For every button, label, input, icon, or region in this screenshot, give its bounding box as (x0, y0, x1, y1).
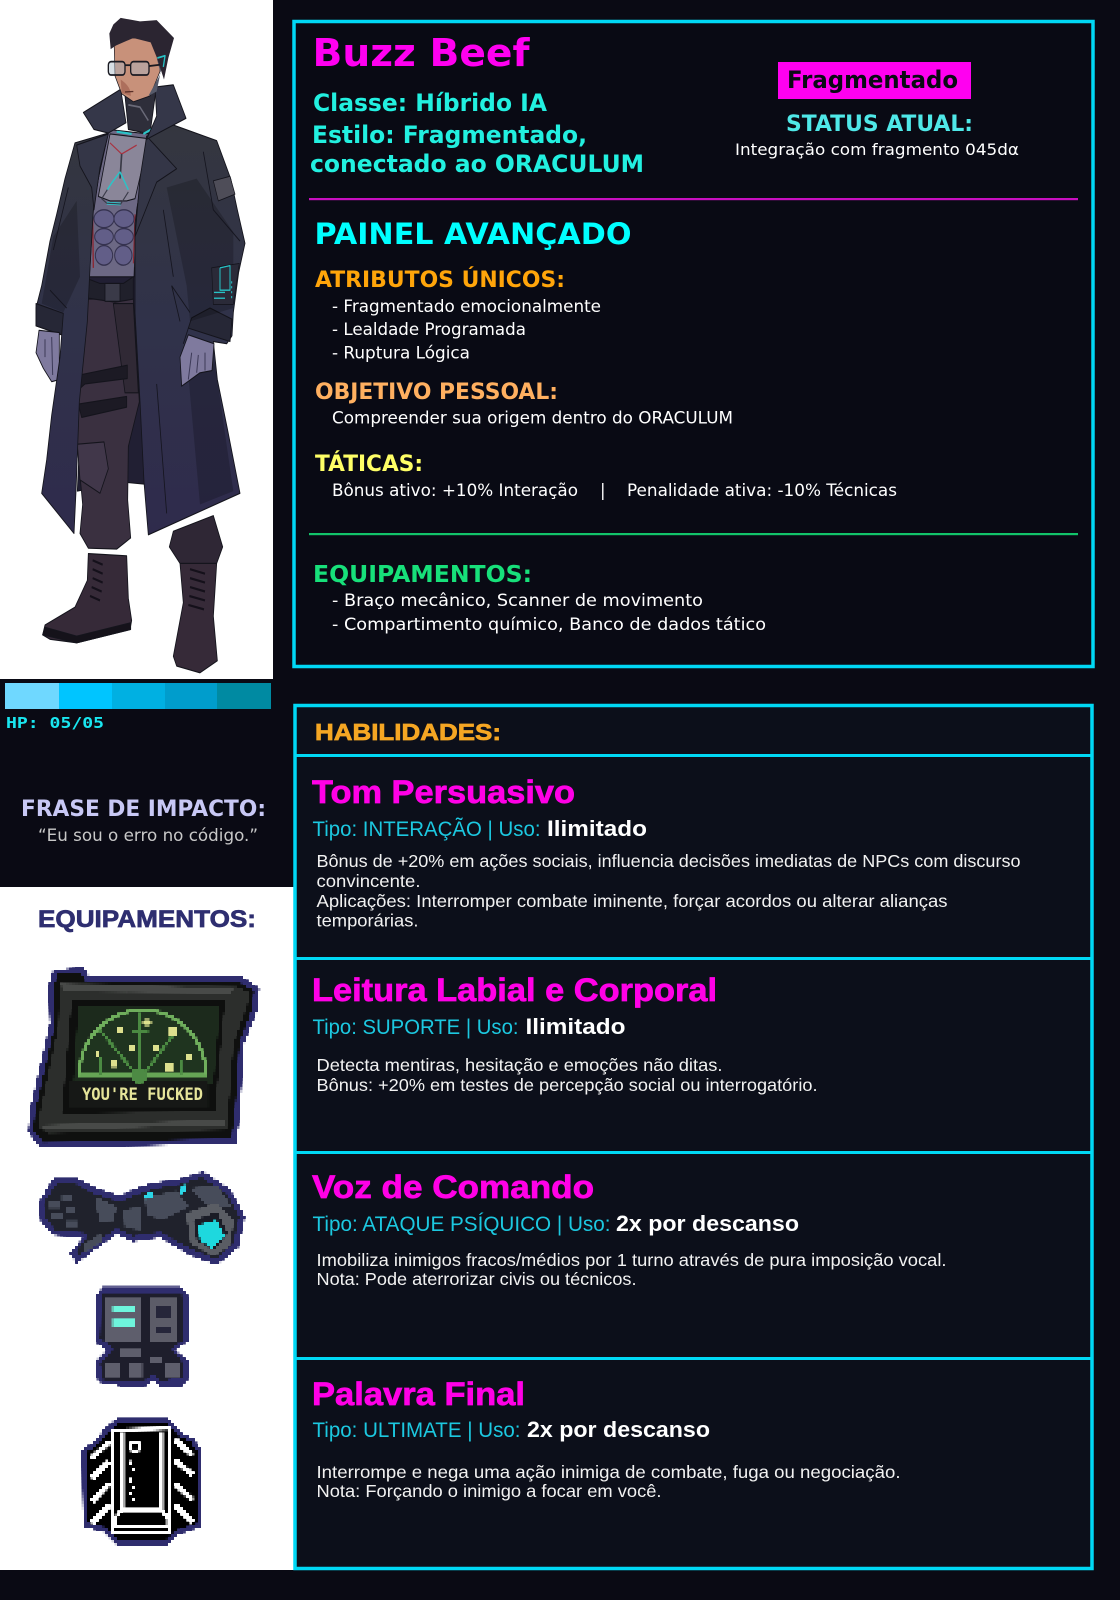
tactics: Bônus ativo: +10% Interação (332, 481, 578, 500)
ability: Tom Persuasivo: temporárias. (316, 910, 418, 930)
ability: Leitura Labial e Corporal: Detecta mentiras, hesitação e emoções não ditas. (316, 1055, 722, 1075)
coat right side (135, 125, 245, 535)
unique attributes: - Ruptura Lógica (332, 344, 470, 362)
current status: Integração com fragmento 045dα (735, 140, 1019, 159)
ability: Voz de Comando: 2x por descanso (616, 1211, 799, 1236)
ability: Leitura Labial e Corporal: Ilimitado (526, 1014, 626, 1039)
ability: Tom Persuasivo: Bônus de +20% em ações sociais, influencia decisões imediatas de NPCs com discurso (316, 851, 1021, 871)
advanced panel heading: PAINEL AVANÇADO (314, 217, 632, 251)
ability: Voz de Comando: Imobiliza inimigos fracos/médios por 1 turno através de pura imposição vocal. (316, 1250, 946, 1270)
ability: Tom Persuasivo: Tipo: INTERAÇÃO | Uso: (312, 817, 540, 841)
tactics: | (600, 481, 606, 500)
impact phrase (21, 797, 266, 846)
ability: Leitura Labial e Corporal: Tipo: SUPORTE | Uso: (312, 1016, 518, 1039)
ability: Palavra Final: Palavra Final (312, 1376, 525, 1412)
belt (88, 277, 133, 302)
icon: mechanical arm (38, 1172, 245, 1265)
character portrait: Buzz Beef (36, 18, 245, 673)
coat left side (36, 133, 108, 533)
ability: Leitura Labial e Corporal (312, 972, 818, 1095)
equipment list: - Braço mecânico, Scanner de movimento (332, 591, 703, 611)
collar (83, 89, 126, 133)
class and style: Classe: Híbrido IA (313, 89, 547, 117)
class and style: conectado ao ORACULUM (310, 150, 644, 178)
equipment list (313, 562, 766, 635)
equipment heading: EQUIPAMENTOS: (38, 906, 256, 933)
class and style (310, 89, 644, 178)
class and style: Estilo: Fragmentado, (312, 121, 587, 149)
unique attributes: ATRIBUTOS ÚNICOS: (315, 267, 565, 293)
character name: Buzz Beef (312, 31, 530, 75)
ability: Leitura Labial e Corporal: Bônus: +20% em testes de percepção social ou interrogatório. (316, 1075, 818, 1095)
chest (89, 129, 148, 277)
ability: Palavra Final: Tipo: ULTIMATE | Uso: (312, 1419, 520, 1442)
panel: abilities (295, 706, 1092, 1568)
HP bar (5, 683, 271, 709)
trousers (77, 299, 139, 549)
coat shading (42, 179, 233, 504)
hands (36, 330, 59, 382)
HP label: HP: 05/05 (6, 714, 104, 732)
impact phrase heading: FRASE DE IMPACTO: (21, 797, 266, 822)
ability: Palavra Final (312, 1376, 900, 1501)
impact phrase quote: “Eu sou o erro no código.” (38, 826, 258, 846)
arm patches (212, 176, 239, 304)
ability: Voz de Comando: Tipo: ATAQUE PSÍQUICO | Uso: (312, 1213, 610, 1236)
ability: Voz de Comando: Voz de Comando (312, 1169, 594, 1205)
unique attributes: - Lealdade Programada (332, 320, 526, 339)
icon: tactical data bank (82, 1418, 202, 1545)
ability: Palavra Final: Nota: Forçando o inimigo a focar em você. (316, 1481, 662, 1501)
lower right leg (169, 516, 223, 563)
ability: Palavra Final: Interrompe e nega uma ação inimiga de combate, fuga ou negociação. (316, 1462, 900, 1482)
ability: Tom Persuasivo: Aplicações: Interromper combate iminente, forçar acordos ou alterar alianças (316, 891, 948, 911)
abdomen (94, 210, 134, 265)
ability: Palavra Final: 2x por descanso (527, 1417, 710, 1442)
panel: character info (294, 22, 1093, 666)
personal objective (315, 380, 733, 428)
ability: Tom Persuasivo: convincente. (316, 871, 420, 891)
icon: chemical compartment (95, 1287, 189, 1387)
current status (735, 112, 1019, 159)
ability: Leitura Labial e Corporal: Leitura Labial e Corporal (312, 972, 717, 1008)
ability: Tom Persuasivo: Tom Persuasivo (312, 774, 575, 810)
neck (125, 85, 157, 134)
equipment list: EQUIPAMENTOS: (313, 562, 532, 588)
ability: Tom Persuasivo: Ilimitado (547, 816, 647, 841)
ability: Voz de Comando (312, 1169, 946, 1289)
personal objective: OBJETIVO PESSOAL: (315, 380, 558, 405)
tactics (315, 451, 897, 500)
cuffs (36, 304, 63, 335)
glasses (108, 62, 125, 75)
icon: motion scanner (28, 967, 259, 1148)
coat folds (50, 152, 240, 513)
current status: STATUS ATUAL: (786, 112, 973, 137)
scanner screen text: YOU'RE FUCKED (82, 1085, 203, 1105)
equipment list: - Compartimento químico, Banco de dados tático (332, 615, 766, 635)
ability: Tom Persuasivo (312, 774, 1021, 930)
unique attributes (315, 267, 601, 362)
status badge: Fragmentado (787, 66, 958, 94)
boots (43, 554, 132, 643)
coat interior (77, 268, 147, 491)
tactics: TÁTICAS: (315, 451, 423, 477)
unique attributes: - Fragmentado emocionalmente (332, 297, 601, 316)
personal objective: Compreender sua origem dentro do ORACULUM (332, 408, 733, 428)
lapels (77, 134, 108, 210)
face (114, 38, 160, 102)
hair (109, 18, 174, 79)
tactics: Penalidade ativa: -10% Técnicas (627, 481, 897, 500)
ability: Voz de Comando: Nota: Pode aterrorizar civis ou técnicos. (316, 1269, 636, 1289)
abilities heading: HABILIDADES: (315, 719, 501, 745)
